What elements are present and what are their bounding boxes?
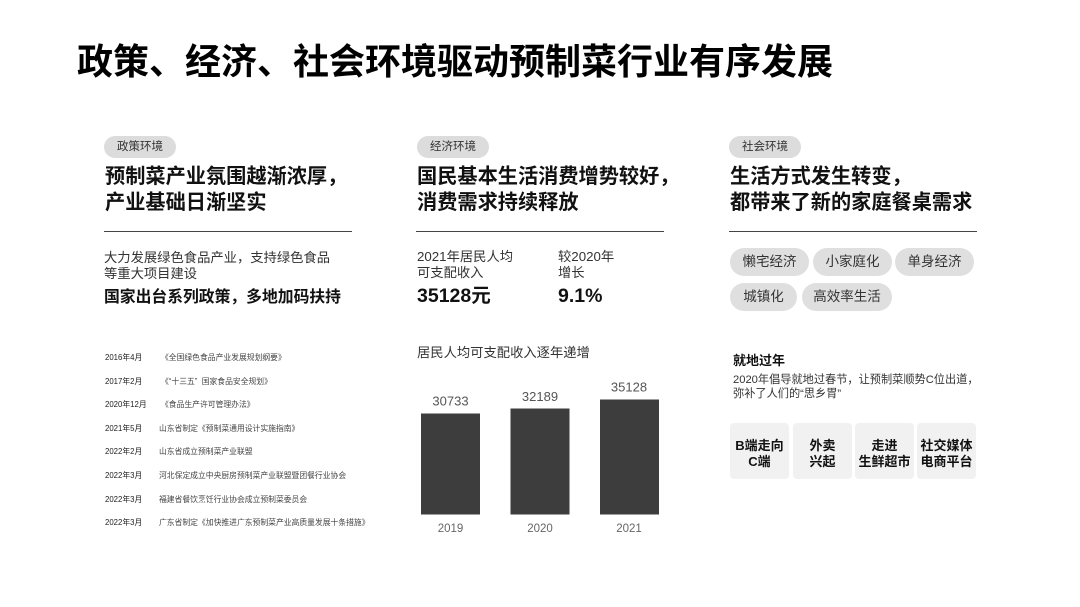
bar 2019: 2019 bbox=[438, 523, 463, 535]
card: B端走向 bbox=[735, 438, 784, 453]
pill: 懒宅经济 bbox=[742, 254, 796, 269]
pill bbox=[813, 248, 892, 276]
tag: economy bbox=[417, 136, 489, 158]
pill: 城镇化 bbox=[743, 289, 784, 304]
pill: 小家庭化 bbox=[826, 254, 880, 269]
growth value: 9.1% bbox=[558, 285, 602, 307]
local new year text: 2020年倡导就地过春节，让预制菜顺势C位出道， bbox=[733, 374, 979, 386]
timeline row 2022-03 Hebei: 2022年3月 bbox=[105, 471, 142, 480]
policy timeline list bbox=[105, 353, 370, 527]
heading: policy: 产业基础日渐坚实 bbox=[105, 192, 267, 214]
pill: 单身经济 bbox=[908, 254, 962, 269]
stat: disposable income bbox=[417, 249, 513, 307]
pill bbox=[895, 248, 974, 276]
heading: policy bbox=[105, 165, 347, 214]
channel cards bbox=[730, 423, 976, 479]
timeline row 2016: 《全国绿色食品产业发展规划纲要》 bbox=[161, 353, 286, 362]
timeline row 2022-02: 2022年2月 bbox=[105, 447, 142, 456]
growth label: 增长 bbox=[558, 265, 585, 280]
card: C端 bbox=[748, 454, 771, 469]
panel: policy environment bbox=[104, 136, 370, 527]
heading: society: 都带来了新的家庭餐桌需求 bbox=[730, 192, 972, 214]
local new year text bbox=[733, 373, 979, 400]
pill: 高效率生活 bbox=[813, 289, 881, 304]
income label: 2021年居民人均 bbox=[417, 249, 513, 264]
bar 2020: 32189 bbox=[522, 389, 558, 404]
bar 2020 bbox=[510, 389, 570, 535]
bar 2021: 2021 bbox=[616, 523, 642, 535]
card bbox=[917, 423, 976, 479]
bar 2021 bbox=[600, 380, 659, 535]
timeline row 2020 bbox=[105, 400, 255, 409]
timeline row 2022-03 Guangdong: 2022年3月 bbox=[105, 518, 142, 527]
timeline row 2022-03 Fujian: 福建省餐饮烹饪行业协会成立预制菜委员会 bbox=[159, 495, 307, 504]
policy emphasis: 国家出台系列政策，多地加码扶持 bbox=[104, 289, 341, 306]
chart title: 居民人均可支配收入逐年递增 bbox=[417, 345, 590, 360]
pill bbox=[802, 283, 892, 311]
card: 外卖 bbox=[809, 438, 836, 453]
income label bbox=[417, 249, 513, 280]
bar 2021: 35128 bbox=[611, 380, 647, 394]
panel: economic environment bbox=[417, 136, 679, 535]
card: 电商平台 bbox=[920, 454, 972, 469]
timeline row 2020: 《食品生产许可管理办法》 bbox=[161, 400, 255, 409]
tag: economy: 经济环境 bbox=[430, 141, 476, 153]
title: 政策、经济、社会环境驱动预制菜行业有序发展 bbox=[77, 41, 833, 82]
policy description: 等重大项目建设 bbox=[104, 266, 197, 281]
timeline row 2022-02: 山东省成立预制菜产业联盟 bbox=[159, 447, 253, 456]
timeline row 2020: 2020年12月 bbox=[105, 400, 147, 409]
subheading: local new year: 就地过年 bbox=[733, 353, 785, 368]
heading: policy: 预制菜产业氛围越渐浓厚， bbox=[105, 166, 347, 188]
heading: society: 生活方式发生转变， bbox=[730, 166, 912, 188]
tag: society bbox=[729, 136, 801, 158]
card: 社交媒体 bbox=[920, 438, 972, 453]
heading: economy: 国民基本生活消费增势较好， bbox=[417, 166, 679, 188]
growth label: 较2020年 bbox=[558, 249, 614, 264]
bar 2020: 2020 bbox=[527, 523, 553, 535]
card: 生鲜超市 bbox=[858, 454, 910, 469]
timeline row 2021: 2021年5月 bbox=[105, 424, 142, 433]
timeline row 2017: 《“十三五” 国家食品安全规划》 bbox=[161, 377, 272, 386]
bar 2019 bbox=[421, 394, 480, 535]
card: 兴起 bbox=[809, 454, 836, 469]
income value: 35128元 bbox=[417, 285, 491, 307]
timeline row 2022-02 bbox=[105, 447, 253, 456]
pill bbox=[730, 248, 809, 276]
heading: economy bbox=[417, 165, 679, 214]
pill bbox=[730, 283, 797, 311]
timeline row 2021: 山东省制定《预制菜通用设计实施指南》 bbox=[159, 424, 299, 433]
tag: policy: 政策环境 bbox=[117, 141, 163, 153]
card bbox=[730, 423, 789, 479]
policy description bbox=[104, 250, 330, 281]
income label: 可支配收入 bbox=[417, 265, 483, 280]
tag: policy bbox=[104, 136, 176, 158]
panel: social environment bbox=[729, 136, 979, 479]
card: 走进 bbox=[871, 438, 898, 453]
growth label bbox=[558, 249, 614, 280]
timeline row 2016: 2016年4月 bbox=[105, 353, 142, 362]
local new year text: 弥补了人们的“思乡胃” bbox=[733, 388, 841, 400]
bar chart: income by year bbox=[417, 345, 659, 535]
timeline row 2022-03 Guangdong: 广东省制定《加快推进广东预制菜产业高质量发展十条措施》 bbox=[159, 518, 370, 527]
timeline row 2017: 2017年2月 bbox=[105, 377, 142, 386]
heading: economy: 消费需求持续释放 bbox=[417, 192, 579, 214]
timeline row 2016 bbox=[105, 353, 286, 362]
timeline row 2017 bbox=[105, 377, 272, 386]
card bbox=[793, 423, 852, 479]
card bbox=[855, 423, 914, 479]
trend pills bbox=[730, 248, 974, 311]
timeline row 2022-03 Hebei: 河北保定成立中央厨房预制菜产业联盟暨团餐行业协会 bbox=[159, 471, 346, 480]
timeline row 2022-03 Fujian: 2022年3月 bbox=[105, 495, 142, 504]
stat: growth bbox=[558, 249, 614, 307]
bar 2019: 30733 bbox=[432, 394, 469, 408]
tag: society: 社会环境 bbox=[742, 141, 788, 153]
policy description: 大力发展绿色食品产业，支持绿色食品 bbox=[104, 250, 330, 265]
heading: society bbox=[730, 165, 972, 214]
